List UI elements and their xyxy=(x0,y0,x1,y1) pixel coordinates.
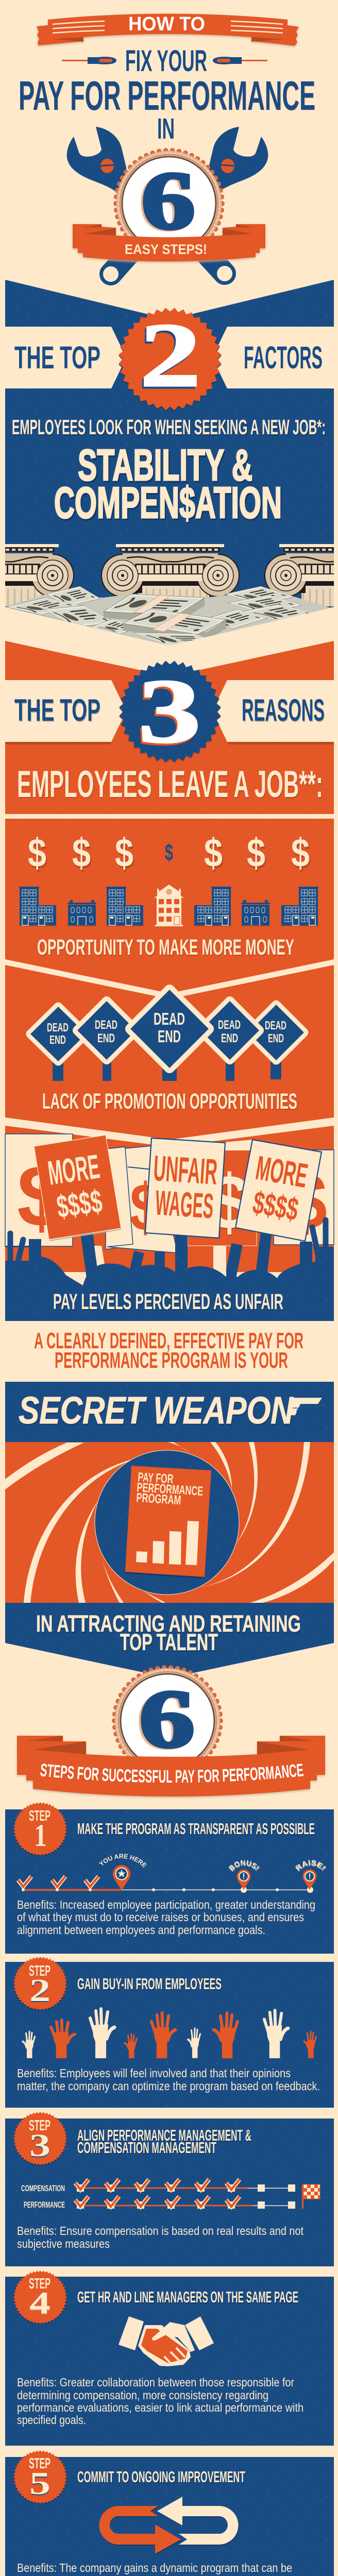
badge: step 2: 2 xyxy=(29,1973,50,2008)
row: performance: PERFORMANCE xyxy=(24,2200,65,2210)
document: pay for performance program: PAY FOR xyxy=(138,1470,174,1486)
badge: step 4: 4 xyxy=(29,2287,50,2321)
badge: step 5: 5 xyxy=(29,2467,50,2502)
back sign middle xyxy=(107,1146,178,1253)
sign 4 xyxy=(200,1001,259,1060)
wrenches xyxy=(67,127,268,282)
section: top 3 reasons xyxy=(5,641,334,814)
medal with 6 xyxy=(114,1668,221,1774)
heading: the top: THE TOP xyxy=(14,340,100,375)
benefits text: alignment between employees and performance goals. xyxy=(17,1923,265,1937)
band shadow xyxy=(5,742,334,744)
badge: 3: 3 xyxy=(138,660,201,762)
pin: bonus xyxy=(237,1869,250,1890)
cream band left xyxy=(5,680,126,742)
sign 3 xyxy=(130,990,209,1068)
icon: screwdriver right xyxy=(213,57,267,64)
row of dollar signs: $ xyxy=(247,830,265,875)
raised hands xyxy=(23,2009,316,2058)
sign 1: DEAD xyxy=(47,1021,69,1034)
header: how to fix your pay for performance xyxy=(19,13,315,282)
badge: step 5: 5 xyxy=(29,2466,50,2501)
badge: step 4 xyxy=(13,2270,67,2325)
panel: step 2 xyxy=(5,1957,334,2108)
row of dollar signs: $ xyxy=(115,830,133,875)
sign 2: DEAD xyxy=(95,1018,117,1032)
icon: loop arrows xyxy=(99,2497,239,2554)
statement: a clearly defined effective program xyxy=(34,1328,303,1373)
sign 4: END xyxy=(221,1031,238,1045)
icon: screwdriver left xyxy=(62,57,116,64)
heading: the top: THE TOP xyxy=(14,693,100,727)
dead end signs xyxy=(30,990,304,1081)
row of dollar signs xyxy=(28,830,310,875)
illustration: ionic columns xyxy=(0,544,338,606)
cream post stripes xyxy=(94,1246,226,1277)
badge: step 3: STEP xyxy=(29,2117,50,2134)
blue panel xyxy=(5,280,334,646)
row of buildings xyxy=(19,885,318,926)
icon: pistol xyxy=(288,1398,322,1415)
arc label: bonus: BONUS! xyxy=(229,1860,260,1872)
sign 3: END xyxy=(158,1027,181,1046)
ribbon: how to: HOW TO xyxy=(128,13,205,35)
row of dollar signs: $ xyxy=(72,830,91,875)
section: reasons panels xyxy=(5,819,334,1321)
sign: unfair wages: WAGES xyxy=(154,1183,215,1226)
sign 4: DEAD xyxy=(218,1018,241,1032)
sign 2 xyxy=(77,1001,136,1060)
pin: you are here xyxy=(113,1865,130,1890)
sign 2: END xyxy=(97,1031,115,1045)
row: compensation xyxy=(21,2179,295,2193)
row of dollar signs: $ xyxy=(291,830,310,875)
benefits text: specified goals. xyxy=(17,2413,86,2427)
badge: step 3: 3 xyxy=(29,2129,50,2164)
row of dollar signs: $ xyxy=(165,839,173,866)
back signs xyxy=(5,1134,334,1253)
back sign orange xyxy=(188,1140,257,1246)
blue banner xyxy=(5,1382,334,1442)
back sign right: $ xyxy=(286,1157,327,1246)
section: top 2 factors xyxy=(0,280,338,647)
row of dollar signs: $ xyxy=(28,830,46,875)
cream band left xyxy=(5,327,126,388)
sign posts xyxy=(35,1229,306,1283)
heading: top talent: TOP TALENT xyxy=(120,1629,218,1655)
bar chart xyxy=(136,1521,199,1565)
badge: step 1: 1 xyxy=(34,1819,47,1853)
benefits text xyxy=(17,2224,303,2250)
sign 5: END xyxy=(268,1031,284,1045)
panel: step 3 xyxy=(5,2112,334,2266)
cream chevron stripe 2 xyxy=(5,1117,334,1147)
benefits text: subjective measures xyxy=(17,2237,110,2250)
back sign left xyxy=(5,1134,73,1246)
cream band right xyxy=(212,680,334,742)
heading: stability: STABILITY & xyxy=(78,441,252,490)
panel: step 5 xyxy=(5,2450,334,2576)
row: performance xyxy=(24,2196,295,2210)
benefits text xyxy=(17,2376,303,2427)
title: fix your: FIX YOUR xyxy=(125,44,207,78)
benefits text xyxy=(17,2066,320,2093)
benefits text xyxy=(17,1898,315,1937)
blue banner with chevron xyxy=(5,1603,334,1678)
badge: step 1: STEP xyxy=(29,1808,50,1824)
badge: step 4: 4 xyxy=(29,2286,50,2320)
title: GAIN BUY-IN FROM EMPLOYEES xyxy=(77,1975,222,1993)
blue circle xyxy=(95,1450,239,1595)
timeline xyxy=(16,1854,326,1893)
sign posts xyxy=(53,1061,281,1081)
panel: step 4 xyxy=(5,2270,334,2446)
ribbon: how to xyxy=(37,13,299,46)
row: compensation: COMPENSATION xyxy=(21,2183,65,2193)
sign: more money right: $$$$ xyxy=(250,1185,301,1228)
badge: step 5 xyxy=(13,2450,67,2505)
sign: more money right xyxy=(235,1140,322,1241)
sign 5: DEAD xyxy=(265,1019,286,1032)
section: secret weapon xyxy=(5,1382,334,1678)
benefits text: Benefits: Employees will feel involved and that their opinions xyxy=(17,2066,291,2080)
back sign orange: $ xyxy=(209,1159,250,1245)
badge: step 5: STEP xyxy=(29,2455,50,2472)
back sign middle left xyxy=(106,1147,133,1249)
title xyxy=(77,2126,251,2157)
badge: 2: 2 xyxy=(138,306,199,408)
orange spiral panel xyxy=(5,1442,334,1603)
badge: 2 xyxy=(119,304,222,412)
benefits text: determining compensation, more consistency regarding xyxy=(17,2388,268,2402)
building: cream house xyxy=(154,885,184,926)
protest scene xyxy=(5,1134,334,1321)
orange panel xyxy=(5,641,334,814)
spiral lines xyxy=(5,1442,334,1603)
medal with 6: 6 xyxy=(137,1674,193,1766)
icon: checkered flag xyxy=(302,2184,320,2209)
sign: unfair wages: UNFAIR xyxy=(153,1148,218,1192)
badge: 3 xyxy=(119,660,221,764)
sign: more money left: MORE xyxy=(45,1147,102,1192)
sign: more money left xyxy=(34,1135,122,1241)
back sign middle: $ xyxy=(130,1170,161,1245)
arc label: raise: RAISE! xyxy=(295,1860,326,1872)
cream band right xyxy=(212,327,334,388)
crowd silhouette xyxy=(5,1220,334,1321)
document: pay for performance program: PERFORMANCE xyxy=(137,1480,204,1499)
badge: step 3 xyxy=(13,2112,67,2166)
row of dollar signs: $ xyxy=(204,830,223,875)
title: in: IN xyxy=(157,112,175,145)
benefits text: Benefits: The company gains a dynamic program that can be xyxy=(17,2561,292,2574)
sign 3: DEAD xyxy=(154,1009,185,1028)
sign 1: END xyxy=(49,1033,66,1046)
panel: step 1 xyxy=(5,1802,334,1954)
progress chart xyxy=(21,2179,320,2210)
section: six steps medal and ribbon xyxy=(16,1665,326,1799)
icon: handshake xyxy=(119,2316,214,2366)
ribbon: easy steps: EASY STEPS! xyxy=(125,242,207,257)
badge: step 4: STEP xyxy=(29,2276,50,2292)
sign: more money left: $$$$ xyxy=(55,1183,105,1225)
medal with 6 xyxy=(116,150,222,257)
badge: step 2: STEP xyxy=(29,1963,50,1979)
badge: 2: 2 xyxy=(140,304,201,406)
back sign right xyxy=(274,1150,334,1246)
benefits text: Benefits: Greater collaboration between those responsible for xyxy=(17,2376,294,2389)
ribbon: easy steps xyxy=(73,224,265,262)
document: pay for performance program xyxy=(125,1466,211,1579)
arc label: you are here: YOU ARE HERE xyxy=(99,1854,147,1868)
medal with 6: 6 xyxy=(139,1673,195,1765)
title: COMPENSATION MANAGEMENT xyxy=(77,2139,216,2157)
sign 5 xyxy=(248,1005,304,1060)
back sign left: $ xyxy=(17,1147,66,1245)
pin: raise xyxy=(303,1869,316,1890)
ribbon text: STEPS FOR SUCCESSFUL PAY FOR PERFORMANCE xyxy=(40,1764,304,1783)
badge: step 1 xyxy=(13,1802,67,1857)
sign: unfair wages xyxy=(145,1138,225,1238)
badge: step 2: 2 xyxy=(29,1974,50,2009)
ribbon xyxy=(17,1736,325,1797)
illustration: pile of money xyxy=(6,586,331,647)
orange panel xyxy=(5,819,334,1272)
badge: step 3: 3 xyxy=(29,2128,50,2163)
badge: step 2 xyxy=(13,1957,67,2011)
cream chevron stripe 1 xyxy=(5,959,334,999)
medal with 6: 6 xyxy=(141,155,195,246)
document: pay for performance program: PROGRAM xyxy=(136,1490,181,1507)
sign 1 xyxy=(30,1007,86,1061)
medal with 6: 6 xyxy=(139,156,193,247)
badge: 3: 3 xyxy=(137,662,199,764)
step panels xyxy=(5,1802,334,2576)
